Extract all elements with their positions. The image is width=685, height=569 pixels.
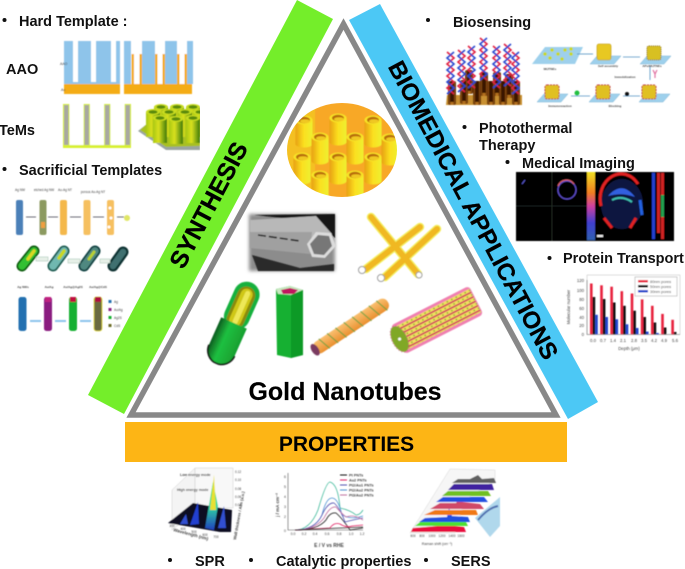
diagram: core-shell sequence: [17, 285, 123, 331]
illustration: nanotube array ellipse: [287, 103, 397, 197]
bottom labels: [168, 554, 491, 569]
chart: SPR 3D plot: Wavelength (nm): [173, 527, 209, 541]
synthesis banner: [88, 0, 333, 414]
chart: catalytic voltammograms: 2: [284, 515, 286, 519]
diagram: immunosensor scheme: Immunoreaction: [548, 104, 572, 108]
bar chart: molecular number vs depth: 4.2: [651, 338, 658, 343]
bar chart: molecular number vs depth: 1.4: [610, 338, 617, 343]
diagram: etching sequence: Au-Ag NT: [58, 188, 72, 192]
bar chart: molecular number vs depth: 2.1: [620, 338, 627, 343]
heading: hard template: Hard Template :: [19, 14, 128, 30]
bar chart: molecular number vs depth: 4.9: [661, 338, 668, 343]
chart legend: Au2 PNTs: [349, 478, 367, 482]
bar chart: molecular number vs depth: 60: [579, 306, 585, 311]
diagram: core-shell sequence: Ag NWs: [17, 285, 29, 289]
chart: SPR 3D plot: 500: [191, 530, 197, 534]
chart: SPR 3D plot: 400: [180, 527, 186, 531]
diagram: core-shell sequence: Ag: [114, 300, 118, 304]
diagram: core-shell sequence: Au/Ag@Ag2S: [63, 285, 83, 289]
chart: SPR 3D plot: 0.04: [235, 503, 241, 507]
diagram: immunosensor scheme: APs/MIJTNEs: [642, 64, 662, 68]
chart: SPR 3D plot: 700: [213, 535, 219, 539]
heading: photothermal therapy: Photothermal: [479, 121, 572, 137]
section: hard template: [0, 14, 207, 150]
chart: catalytic voltammograms: j / mA cm⁻²: [275, 493, 280, 518]
bar chart: molecular number vs depth: 5.6: [672, 338, 679, 343]
section: biosensing: [426, 15, 671, 108]
chart: catalytic voltammograms: 0.6: [325, 532, 329, 536]
label: TeMs: TeMs: [0, 123, 35, 139]
chart: SPR 3D plot: [168, 468, 246, 541]
chart legend: Pt2/Au2 PNTs: [349, 488, 374, 492]
bullet: [2, 18, 6, 22]
section: sacrificial templates: [2, 163, 162, 331]
chart: SPR 3D plot: 600: [202, 533, 208, 537]
bar chart: molecular number vs depth: [566, 275, 680, 351]
bar chart: molecular number vs depth: 3.5: [641, 338, 648, 343]
diagram: AAO template: [60, 41, 193, 94]
illustration: decorated pink nanotube: [386, 286, 483, 357]
series: 30nm pores: [595, 315, 659, 334]
synthesis label: SYNTHESIS: [165, 138, 254, 273]
chart: SERS stacked spectra: [410, 469, 500, 546]
chart: catalytic voltammograms: E / V vs RHE: [314, 543, 345, 549]
properties banner: [125, 422, 567, 462]
bullet: [168, 558, 172, 562]
bar chart: molecular number vs depth: 100: [577, 288, 585, 293]
central triangle outline: [131, 24, 556, 415]
chart: catalytic voltammograms: 0.2: [302, 532, 306, 536]
diagram: etching sequence: Ag NW: [15, 188, 25, 192]
biomedical applications label: BIOMEDICAL APPLICATIONS: [382, 57, 563, 364]
illustration: SEM hexagonal tube: [249, 214, 336, 271]
chart: SPR 3D plot: Low energy mode: [180, 473, 211, 477]
bullet: [424, 558, 428, 562]
bar chart: molecular number vs depth: 20: [579, 323, 585, 328]
bar chart: molecular number vs depth: 2.8: [631, 338, 638, 343]
chart: SPR 3D plot: 0.10: [235, 478, 241, 482]
chart: SERS stacked spectra: 1600: [457, 534, 465, 538]
chart: SPR 3D plot: 0.12: [235, 470, 241, 474]
chart: SERS stacked spectra: 800: [419, 534, 425, 538]
diagram: DNA on nanotube array: [446, 38, 522, 105]
heading: photothermal therapy: Therapy: [479, 138, 535, 154]
heading: protein transport: Protein Transport: [563, 251, 684, 267]
heading: biosensing: Biosensing: [453, 15, 531, 31]
diagram: immunosensor scheme: [532, 44, 671, 108]
chart: SERS stacked spectra: Raman shift (cm⁻¹): [422, 542, 452, 546]
diagram: core-shell sequence: Au/Ag: [114, 308, 123, 312]
diagram: core-shell sequence: Ag2S: [114, 316, 122, 320]
chart legend: [340, 474, 374, 498]
bar chart: molecular number vs depth: Depth (μm): [618, 346, 640, 351]
diagram: core-shell sequence: Au/Ag@CdS: [89, 285, 107, 289]
chart legend: Pt PNTs: [349, 474, 363, 478]
chart: SPR 3D plot: 0.08: [235, 487, 241, 491]
chart: SERS stacked spectra: 1200: [438, 534, 446, 538]
chart: catalytic voltammograms: 6: [284, 475, 286, 479]
chart legend: 80nm pores: [650, 279, 671, 284]
bar chart: molecular number vs depth: 80: [579, 297, 585, 302]
bar chart: molecular number vs depth: 0: [582, 332, 585, 337]
diagram: core-shell sequence: Au/Ag: [45, 285, 54, 289]
bullet: [548, 256, 552, 260]
chart: catalytic voltammograms: [275, 473, 374, 549]
chart legend: Pt3/Au2 PNTs: [349, 494, 374, 498]
section: medical imaging: [506, 156, 674, 241]
chart: catalytic voltammograms: 1.2: [360, 532, 364, 536]
properties label: PROPERTIES: [279, 433, 414, 456]
diagram: etching sequence: [15, 188, 130, 235]
bullet: [2, 167, 6, 171]
chart: catalytic voltammograms: 1.0: [349, 532, 353, 536]
heading: medical imaging: Medical Imaging: [522, 156, 635, 172]
illustration: green capsule: [203, 277, 265, 369]
chart legend: [635, 277, 677, 296]
bar chart: molecular number vs depth: 0.7: [600, 338, 607, 343]
chart: SPR 3D plot: 300: [169, 524, 175, 528]
diagram: AAO template: Au: [61, 88, 65, 92]
diagram: immunosensor scheme: MIJTNEs: [544, 67, 557, 71]
diagram: etching sequence: porous Au-Ag NT: [81, 190, 105, 194]
bar chart: molecular number vs depth: 40: [579, 315, 585, 320]
chart: catalytic voltammograms: 0.4: [313, 532, 317, 536]
diagram: immunosensor scheme: Self assembly: [598, 64, 618, 68]
illustration: crossed gold nanotubes: [358, 217, 437, 282]
bullet: [426, 18, 430, 22]
chart legend: 30nm pores: [650, 289, 671, 294]
diagram: AAO template: AAO: [60, 62, 68, 66]
section: protein transport: [548, 251, 684, 351]
illustration: spiral orange tube: [308, 296, 392, 358]
section: photothermal therapy: [462, 121, 572, 154]
bullet: [462, 125, 466, 129]
chart: SERS stacked spectra: 600: [410, 534, 416, 538]
diagram: etching sequence: etched Ag NW: [34, 188, 54, 192]
bar chart: molecular number vs depth: 120: [577, 278, 585, 283]
chart: SPR 3D plot: 0.06: [235, 495, 241, 499]
chart: SPR 3D plot: Wall thickness / Abs (a.u.): [232, 490, 246, 540]
bar chart: molecular number vs depth: 0.0: [590, 338, 597, 343]
chart legend: 50nm pores: [650, 284, 671, 289]
chart: SPR 3D plot: High energy mode: [177, 488, 208, 492]
series: 80nm pores: [590, 284, 674, 334]
chart: catalytic voltammograms: 0.0: [291, 532, 295, 536]
label: AAO: AAO: [6, 62, 38, 78]
diagram: immunosensor scheme: Immobilization: [614, 75, 636, 79]
chart: SERS stacked spectra: 1000: [428, 534, 436, 538]
image: fluorescence scans: [516, 172, 674, 241]
chart: catalytic voltammograms: 5: [284, 485, 286, 489]
chart legend: Pt2/Au1 PNTs: [349, 484, 374, 488]
diagram: core-shell sequence: CdS: [114, 324, 120, 328]
diagram: TeMs cross section: [63, 104, 131, 148]
series: 50nm pores: [593, 297, 676, 334]
diagram: capsule sequence: [22, 251, 123, 266]
diagram: TeMs 3D array: [138, 104, 207, 150]
bullet: [249, 558, 253, 562]
chart: SERS stacked spectra: 1400: [448, 534, 456, 538]
bar chart: molecular number vs depth: Molecular number: [566, 289, 571, 324]
chart: catalytic voltammograms: 3: [284, 505, 286, 509]
central title: Gold Nanotubes: [248, 378, 442, 406]
diagram: immunosensor scheme: Blocking: [609, 104, 621, 108]
chart: catalytic voltammograms: 0.8: [337, 532, 341, 536]
bullet: [506, 160, 510, 164]
chart: catalytic voltammograms: 4: [284, 495, 286, 499]
illustration: pentagonal prism: [276, 286, 303, 358]
chart: catalytic voltammograms: 0: [284, 529, 286, 533]
biomedical applications banner: [349, 4, 598, 419]
heading: sacrificial templates: Sacrificial Templates: [19, 163, 162, 179]
